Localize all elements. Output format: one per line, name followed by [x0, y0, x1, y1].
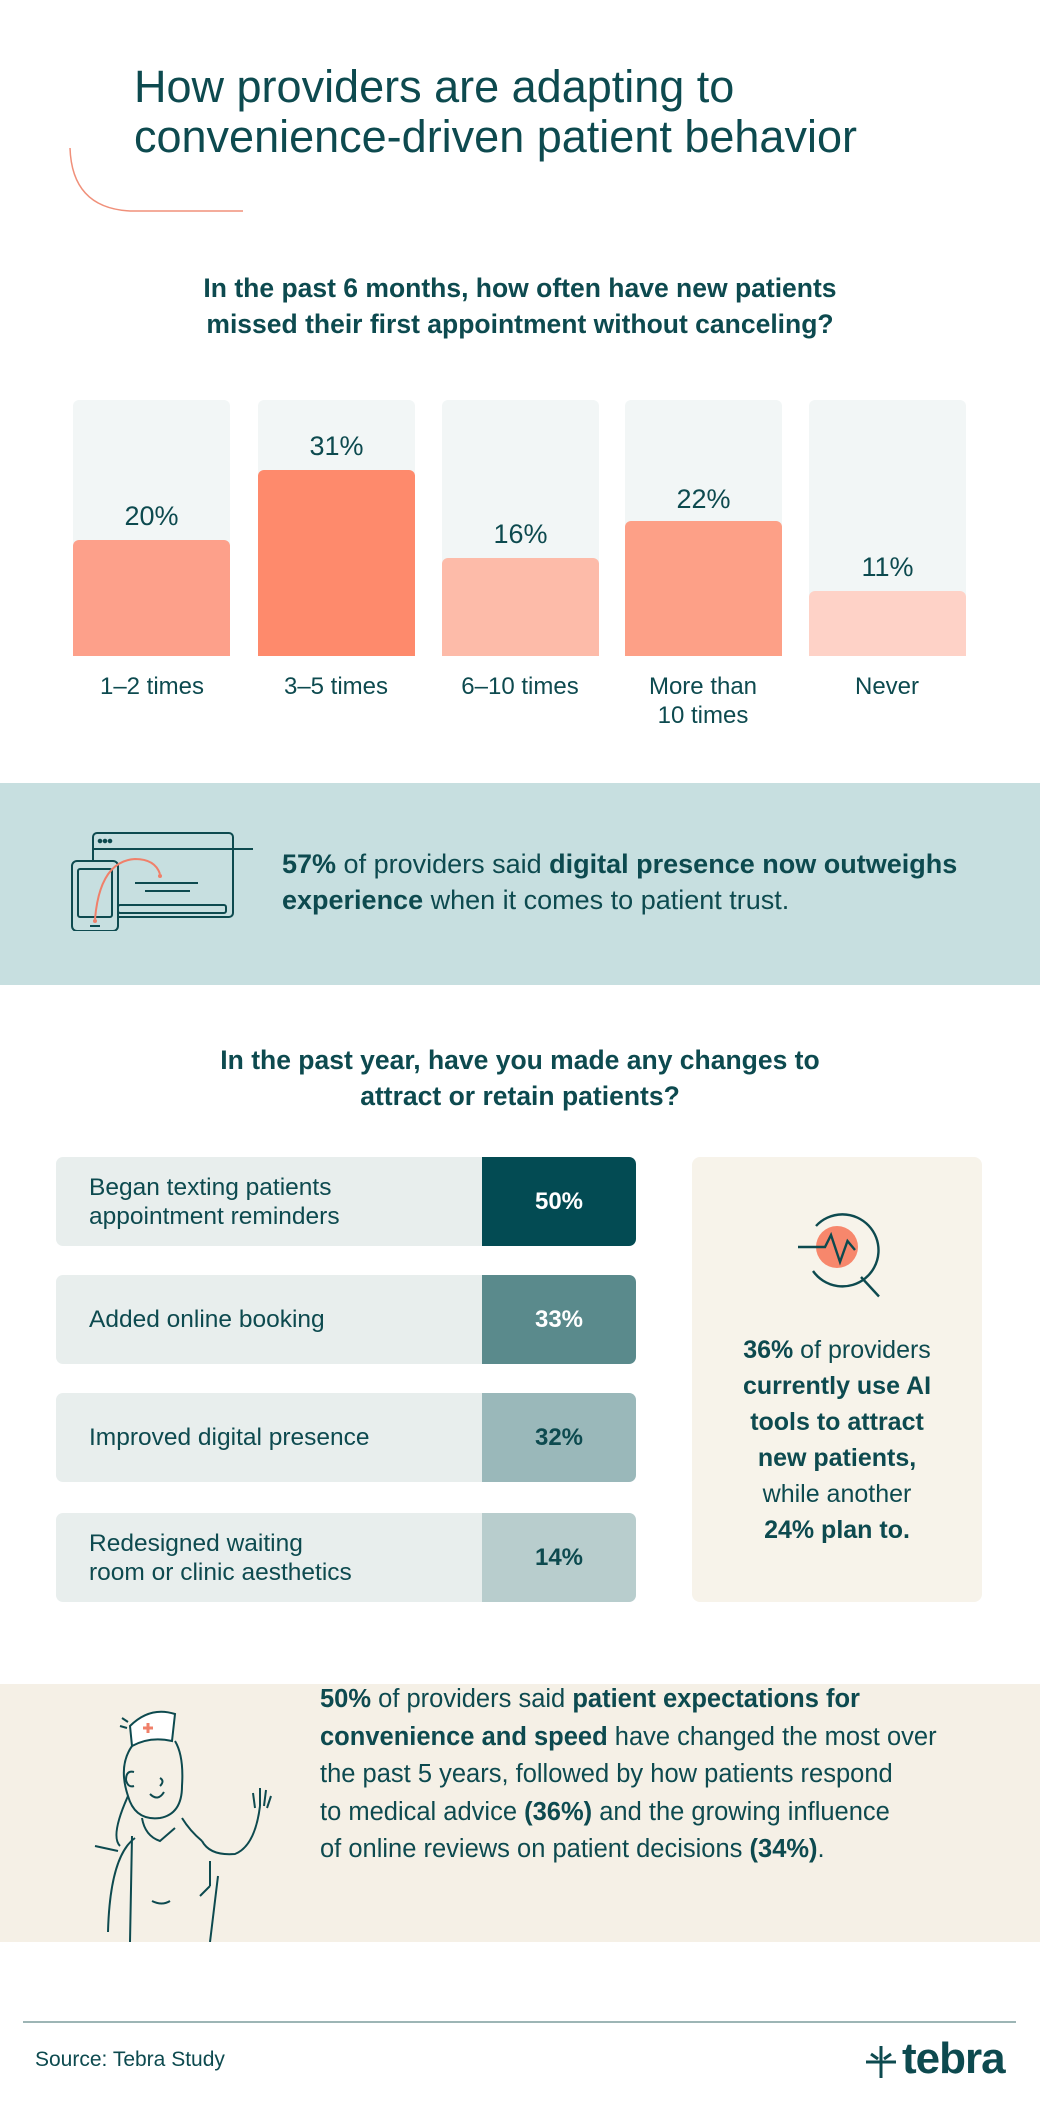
list: changes made	[56, 1157, 636, 1602]
bar chart: missed appointments: More than	[649, 673, 757, 700]
question 1 heading: missed their first appointment without canceling?	[206, 309, 834, 339]
text: 36% use AI: currently use AI	[743, 1372, 931, 1400]
list: changes made: Added online booking	[89, 1306, 325, 1333]
title: convenience-driven patient behavior	[134, 111, 857, 162]
list: changes made: 33%	[535, 1306, 583, 1332]
text: 50% of providers	[320, 1685, 937, 1863]
decorative arc	[69, 148, 243, 212]
bar chart: missed appointments: 22%	[676, 484, 731, 514]
bar chart: missed appointments: 11%	[861, 552, 914, 582]
title	[134, 61, 857, 162]
list: changes made: appointment reminders	[89, 1202, 340, 1230]
panel: AI tools	[692, 1157, 982, 1602]
text: 36% use AI: 24% plan to.	[764, 1516, 910, 1544]
source: Source: Tebra Study	[35, 2048, 225, 2071]
list: changes made: Began texting patients	[89, 1174, 331, 1200]
bar chart: missed appointments: 6–10 times	[461, 673, 579, 700]
list: changes made: Improved digital presence	[89, 1424, 370, 1451]
bar chart: missed appointments: 16%	[493, 519, 548, 549]
list: changes made: 50%	[535, 1188, 583, 1214]
question 1 heading	[203, 273, 837, 339]
list: changes made: Redesigned waiting	[89, 1530, 303, 1556]
question 2 heading: attract or retain patients?	[360, 1081, 680, 1111]
list: changes made: 14%	[535, 1544, 583, 1570]
text: 36% use AI: 36% of providers	[743, 1336, 931, 1364]
icon: devices	[71, 832, 253, 931]
text: 36% use AI	[743, 1336, 931, 1544]
bar chart: missed appointments: 20%	[124, 501, 179, 531]
bar chart: missed appointments: 3–5 times	[284, 673, 388, 700]
text: 36% use AI: new patients,	[758, 1444, 916, 1472]
text: 57% digital presence: experience when it comes to patient trust.	[282, 885, 789, 915]
bar chart: missed appointments	[73, 400, 966, 729]
text: 50% of providers: convenience and speed have changed the most over	[320, 1722, 937, 1750]
text: 50% of providers: to medical advice (36%) and the growing influence	[320, 1798, 890, 1826]
text: 36% use AI: tools to attract	[750, 1408, 924, 1436]
question 1 heading: In the past 6 months, how often have new patients	[203, 273, 837, 303]
panel: patient expectations	[0, 1684, 1040, 1942]
bar chart: missed appointments: 1–2 times	[100, 673, 204, 700]
text: 50% of providers: 50% of providers said patient expectations for	[320, 1685, 860, 1713]
icon: magnifier with pulse	[798, 1213, 880, 1298]
question 2 heading: In the past year, have you made any changes to	[220, 1045, 820, 1075]
panel: digital presence	[0, 783, 1040, 985]
bar chart: missed appointments: 10 times	[658, 702, 748, 729]
bar chart: missed appointments: Never	[855, 673, 919, 700]
text: 50% of providers: of online reviews on patient decisions (34%).	[320, 1835, 825, 1863]
text: 36% use AI: while another	[763, 1480, 911, 1508]
question 2 heading	[220, 1045, 820, 1111]
list: changes made: 32%	[535, 1424, 583, 1450]
text: 57% digital presence	[282, 849, 957, 915]
icon: nurse	[94, 1710, 272, 1942]
bar chart: missed appointments: 31%	[309, 431, 364, 461]
logo: tebra: tebra	[902, 2034, 1005, 2083]
text: 50% of providers: the past 5 years, followed by how patients respond	[320, 1760, 893, 1788]
title: How providers are adapting to	[134, 61, 734, 112]
list: changes made: room or clinic aesthetics	[89, 1558, 352, 1586]
text: 57% digital presence: 57% of providers said digital presence now outweighs	[282, 849, 957, 879]
